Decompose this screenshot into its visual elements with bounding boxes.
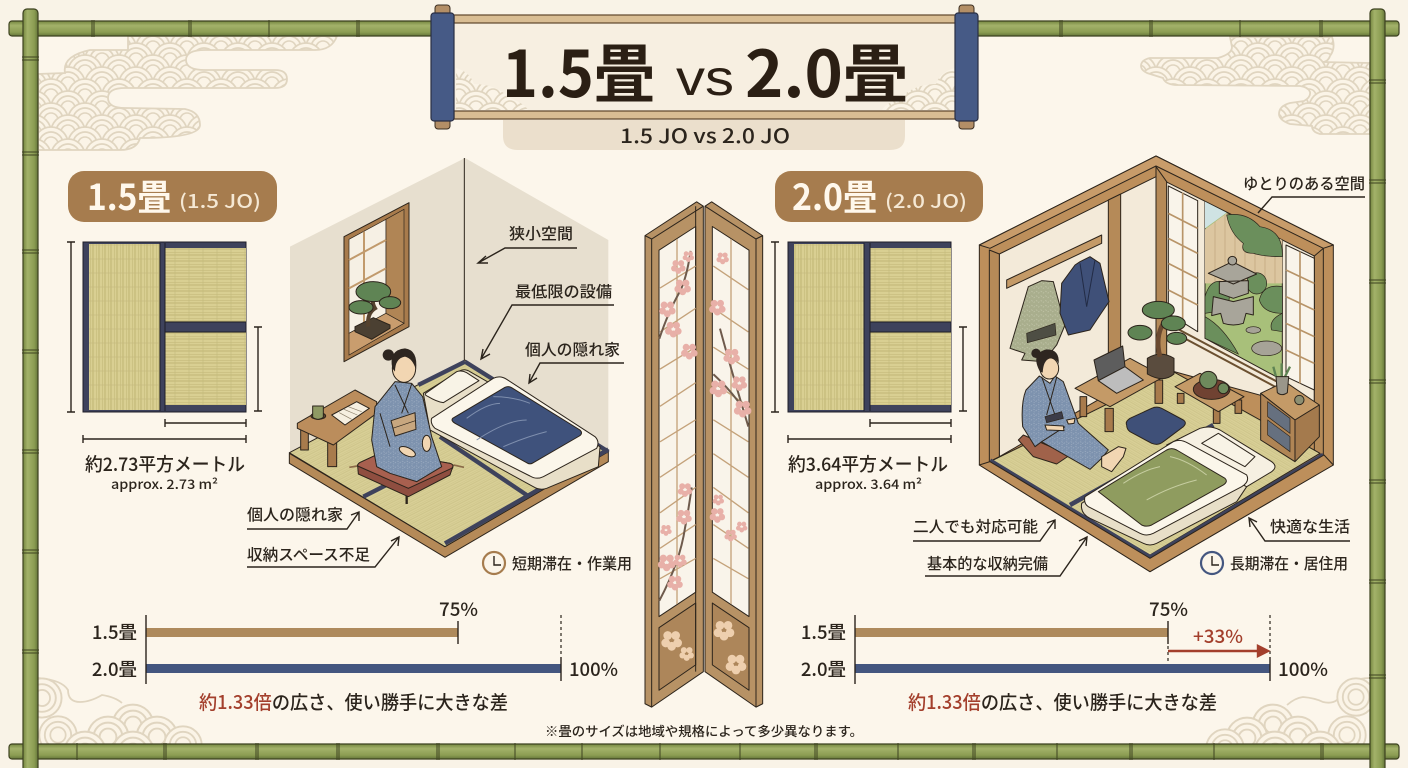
callout: 狭小空間 xyxy=(478,222,577,263)
bonsai xyxy=(349,282,401,339)
tea table xyxy=(1175,371,1244,423)
value 100%: 100% xyxy=(1278,656,1328,682)
callout: 快適な生活: 快適な生活 xyxy=(1270,515,1350,537)
callout: 個人の隠れ家 top: 個人の隠れ家 xyxy=(525,338,620,360)
usage: long stay: 長期滞在・居住用 xyxy=(1230,552,1348,574)
area text 1.5: 約2.73平方メートル xyxy=(85,451,245,477)
value 75%: 75% xyxy=(439,596,478,622)
seated person xyxy=(1018,349,1126,472)
bar 1.5 xyxy=(855,628,1168,637)
title: 1.5畳: 1.5畳 xyxy=(502,24,655,116)
seigaiha cloud: top right xyxy=(1141,37,1370,134)
dimension lines 1.5 xyxy=(67,242,262,443)
tatami floor xyxy=(990,372,1320,555)
walls xyxy=(290,158,608,452)
row label 2.0: 2.0畳 xyxy=(801,656,846,682)
row label 1.5: 1.5畳 xyxy=(92,619,137,645)
callout: ゆとりのある空間 xyxy=(1243,172,1365,213)
dimension lines 2.0 xyxy=(771,242,967,443)
left roller xyxy=(431,5,454,129)
badge: 2.0 jo: (2.0 JO) xyxy=(885,187,967,214)
callout: 収納スペース不足 xyxy=(247,537,399,567)
bar 2.0 xyxy=(855,664,1270,673)
wall corner xyxy=(463,158,466,360)
right leaf xyxy=(705,202,763,707)
scroll bottom band xyxy=(454,111,956,119)
area english 1.5: approx. 2.73 m² xyxy=(111,474,218,493)
cloud behind title left xyxy=(456,68,528,110)
outer timber frame xyxy=(979,156,1333,572)
area text 2.0: 約3.64平方メートル xyxy=(788,451,948,477)
left leaf xyxy=(645,202,703,707)
right wall xyxy=(1156,177,1314,410)
tatami plan 1.5 xyxy=(83,242,246,412)
top beam xyxy=(979,156,1333,248)
bar caption: 約1.33倍の広さ、使い勝手に大きな差 xyxy=(199,688,508,715)
bar 1.5 xyxy=(146,628,458,637)
bar chart right xyxy=(801,596,1328,715)
panel: 2.0 jo xyxy=(771,156,1365,715)
bar 2.0 xyxy=(146,664,561,673)
scroll paper xyxy=(454,15,956,120)
obi on robe xyxy=(1027,323,1056,343)
callout: 収納スペース不足: 収納スペース不足 xyxy=(247,543,370,565)
right roller xyxy=(955,5,978,129)
seigaiha cloud: bottom left xyxy=(38,677,202,744)
bookshelf xyxy=(1261,363,1319,462)
bamboo: left post xyxy=(22,9,39,768)
shoji right xyxy=(1286,245,1314,390)
callout: 二人でも対応可能: 二人でも対応可能 xyxy=(913,515,1038,537)
robe green xyxy=(1010,281,1065,362)
badge: 1.5 jo: (1.5 JO) xyxy=(179,187,261,214)
row label 2.0: 2.0畳 xyxy=(92,656,137,682)
garden window xyxy=(1205,202,1282,380)
footnote: ※畳のサイズは地域や規格によって多少異なります。 xyxy=(545,721,863,740)
callout: 個人の隠れ家 top xyxy=(525,338,624,383)
badge: 1.5 jo: 1.5畳 xyxy=(87,169,171,221)
bar caption: 約1.33倍の広さ、使い勝手に大きな差 xyxy=(908,688,1217,715)
robe navy xyxy=(1060,257,1109,335)
tatami borders xyxy=(363,362,608,543)
cloud behind title right xyxy=(882,68,955,110)
value +33%: +33% xyxy=(1193,623,1243,649)
bonsai pot xyxy=(1128,301,1187,379)
illustration: 2.0 jo room xyxy=(979,156,1333,572)
left wall xyxy=(999,177,1156,457)
title scroll xyxy=(431,5,978,129)
title text xyxy=(502,24,908,116)
usage: short stay: 短期滞在・作業用 xyxy=(512,552,632,574)
scroll top band xyxy=(454,15,956,23)
panel: 1.5 jo xyxy=(67,158,632,715)
title: vs: vs xyxy=(676,50,734,106)
folding screen xyxy=(645,202,763,707)
zabuton cushion xyxy=(349,452,464,504)
badge: 2.0 jo: 2.0畳 xyxy=(792,169,877,221)
badge: 1.5 jo xyxy=(68,169,277,222)
front timber edge xyxy=(979,455,1333,572)
value 100%: 100% xyxy=(569,656,618,682)
bamboo: top left xyxy=(9,20,433,37)
callout: 最低限の設備 xyxy=(481,280,614,359)
bar chart left xyxy=(92,596,618,715)
badge: 2.0 jo xyxy=(775,169,983,222)
row label 1.5: 1.5畳 xyxy=(801,619,846,645)
seigaiha cloud: top left xyxy=(38,36,337,150)
callout: 基本的な収納完備: 基本的な収納完備 xyxy=(927,552,1048,574)
tatami floor xyxy=(289,360,608,547)
subtitle: 1.5 JO vs 2.0 JO xyxy=(620,120,790,149)
value 75%: 75% xyxy=(1149,596,1188,622)
callout: 快適な生活 xyxy=(1249,515,1350,541)
tatami plan 2.0 xyxy=(788,242,951,412)
axis and ticks xyxy=(855,615,1270,684)
callout: 最低限の設備: 最低限の設備 xyxy=(515,280,612,302)
window sill xyxy=(1173,327,1283,389)
area english 2.0: approx. 3.64 m² xyxy=(815,474,922,493)
callout: ゆとりのある空間: ゆとりのある空間 xyxy=(1243,172,1365,194)
title: 2.0畳: 2.0畳 xyxy=(745,24,908,116)
timber posts xyxy=(989,167,1323,462)
window xyxy=(344,203,409,362)
callout: 狭小空間: 狭小空間 xyxy=(509,222,573,244)
shoji left xyxy=(1168,186,1198,332)
bamboo: right post xyxy=(1369,9,1386,768)
laptop desk xyxy=(1075,346,1164,432)
hanger rail xyxy=(1007,235,1102,288)
arrow +33% xyxy=(1168,646,1268,656)
futon xyxy=(423,370,600,489)
callout: 個人の隠れ家 bottom: 個人の隠れ家 xyxy=(247,503,343,525)
bamboo: top right xyxy=(975,20,1399,37)
futon xyxy=(1081,427,1275,545)
bamboo: bottom xyxy=(9,743,1399,760)
axis and ticks xyxy=(146,615,561,684)
illustration: 1.5 jo room xyxy=(289,158,608,557)
seated person xyxy=(372,348,442,482)
stone lantern xyxy=(1208,262,1257,325)
subtitle xyxy=(503,120,905,150)
low table xyxy=(297,390,377,467)
floor edge xyxy=(289,452,608,557)
callout: 基本的な収納完備 xyxy=(925,537,1087,576)
navy floor cushion xyxy=(1126,407,1185,444)
seigaiha cloud: bottom right xyxy=(1206,677,1370,744)
floor border band xyxy=(990,425,1323,557)
